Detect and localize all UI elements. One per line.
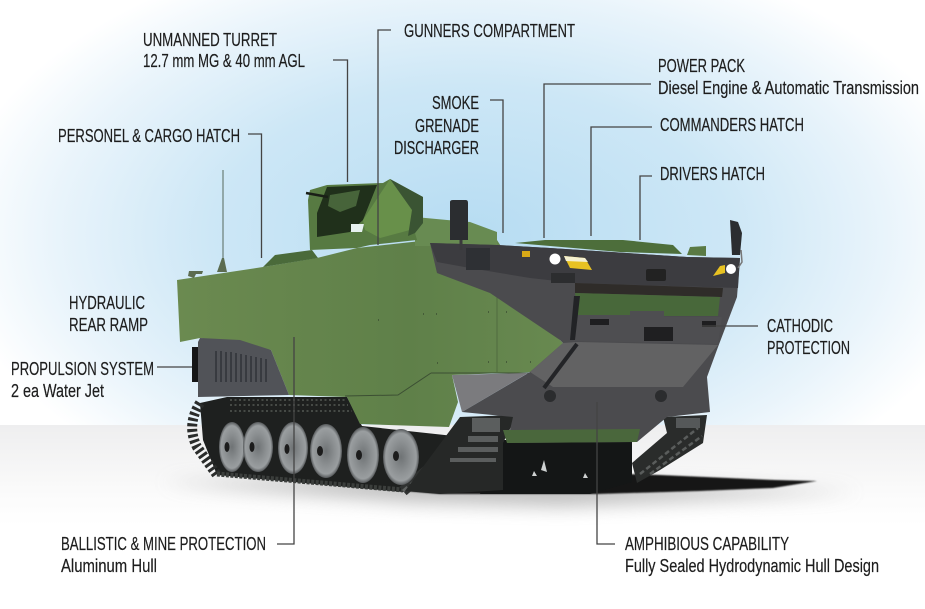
label: power pack (658, 56, 919, 98)
label: cathodic protection: CATHODIC (767, 316, 833, 336)
right track (632, 415, 707, 483)
label: ballistic and mine protection: BALLISTIC & MINE PROTECTION (61, 534, 266, 554)
label: smoke grenade discharger: DISCHARGER (394, 138, 479, 158)
label: ballistic and mine protection (61, 534, 266, 576)
label: commanders hatch: COMMANDERS HATCH (660, 115, 804, 135)
rear hatch (263, 250, 318, 267)
label: amphibious capability: AMPHIBIOUS CAPABILITY (625, 534, 789, 554)
label: ballistic and mine protection: Aluminum Hull (61, 556, 157, 576)
vehicle (160, 170, 860, 506)
label: smoke grenade discharger: SMOKE (432, 93, 479, 113)
label: power pack: POWER PACK (658, 56, 745, 76)
background: sky glow (0, 0, 925, 430)
hatch fitting (687, 246, 706, 256)
left track (192, 397, 466, 492)
label: propulsion system: 2 ea Water Jet (11, 381, 104, 401)
mirror right (730, 220, 742, 268)
label: cathodic protection (767, 316, 850, 358)
label: unmanned turret (143, 30, 305, 71)
gray side plate (452, 373, 528, 412)
rear roof fittings (188, 258, 227, 278)
label: hydraulic rear ramp: REAR RAMP (69, 315, 148, 335)
front track stub (405, 415, 517, 494)
far-side running gear (480, 440, 632, 494)
label: hydraulic rear ramp (69, 293, 148, 335)
rear sponson (192, 338, 289, 397)
road wheels (219, 422, 419, 485)
label: gunners compartment: GUNNERS COMPARTMENT (404, 21, 575, 41)
rear antenna (222, 170, 224, 260)
leader lines (157, 30, 758, 544)
label: smoke grenade discharger (394, 93, 479, 158)
hull crease and rivets (345, 290, 532, 396)
label: propulsion system (11, 359, 154, 401)
label: personel and cargo hatch: PERSONEL & CARGO HATCH (58, 126, 240, 146)
mirror left (450, 200, 468, 250)
label: unmanned turret: 12.7 mm MG & 40 mm AGL (143, 51, 305, 71)
label: amphibious capability (625, 534, 879, 576)
label: cathodic protection: PROTECTION (767, 338, 850, 358)
front glacis (430, 243, 740, 443)
hull side (177, 240, 563, 427)
label: drivers hatch: DRIVERS HATCH (660, 164, 765, 184)
right upper block (415, 217, 497, 246)
lights (522, 251, 736, 276)
label: propulsion system: PROPULSION SYSTEM (11, 359, 154, 379)
background: floor (0, 425, 925, 525)
label: hydraulic rear ramp: HYDRAULIC (69, 293, 145, 313)
green roof behind front (515, 240, 682, 254)
ground shadow (160, 470, 860, 506)
label: unmanned turret: UNMANNED TURRET (143, 30, 277, 50)
label: smoke grenade discharger: GRENADE (415, 116, 479, 136)
turret (306, 179, 423, 250)
